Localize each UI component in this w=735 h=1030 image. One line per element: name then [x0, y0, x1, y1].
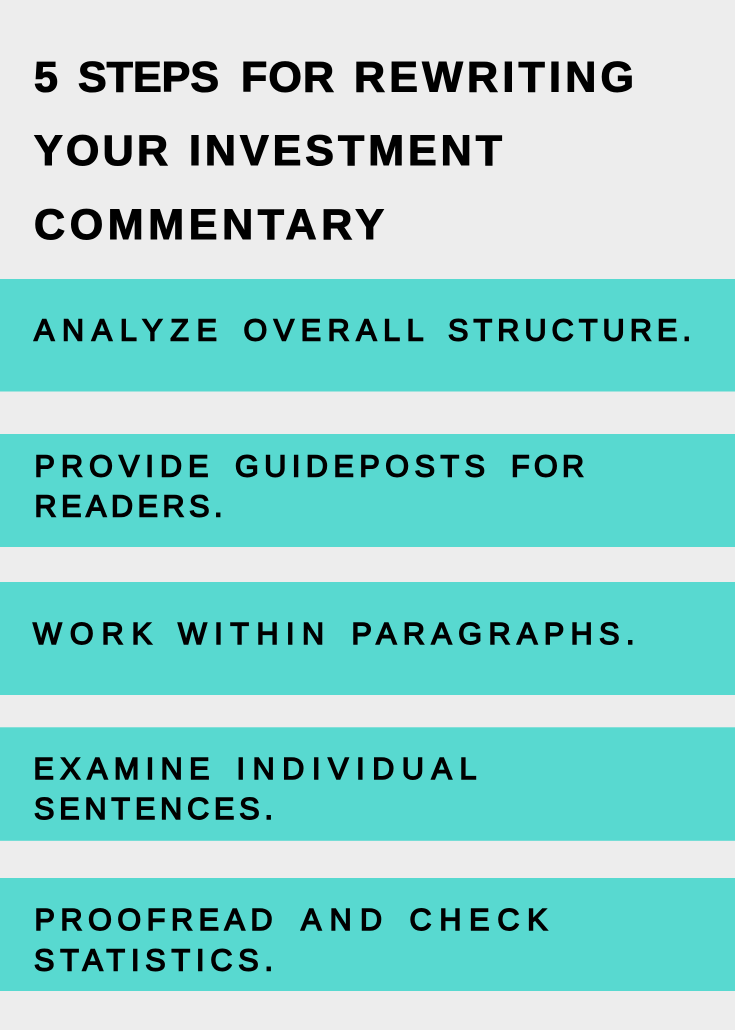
panel: step 1 analyze overall structure: ANALYZE	[34, 314, 217, 348]
panel: step 1 analyze overall structure: OVERALL	[244, 314, 423, 348]
panel: step 3 work within paragraphs: WITHIN	[178, 617, 324, 651]
panel: step 4 examine individual sentences: SENTENCES.	[34, 792, 273, 826]
title: FOR	[241, 54, 334, 102]
panel: step 4 examine individual sentences: EXAMINE	[34, 752, 210, 786]
title: REWRITING	[354, 54, 634, 102]
title	[34, 54, 634, 249]
panel: step 5 proofread and check statistics: AND	[301, 903, 382, 937]
panel: step 2 provide guideposts	[0, 434, 735, 547]
panel: step 2 provide guideposts: PROVIDE	[34, 450, 208, 484]
panel: step 4 examine individual sentences	[0, 727, 735, 841]
panel: step 3 work within paragraphs: WORK	[33, 617, 152, 651]
panel: step 5 proofread and check statistics: CHECK	[410, 903, 548, 937]
title: INVESTMENT	[189, 127, 502, 175]
title: STEPS	[78, 54, 219, 102]
panel: step 2 provide guideposts: READERS.	[34, 490, 222, 524]
title: YOUR	[34, 127, 168, 175]
panel: step 3 work within paragraphs: PARAGRAPHS.	[352, 617, 634, 651]
panel: step 1 analyze overall structure: STRUCTURE.	[448, 314, 691, 348]
panel: step 2 provide guideposts: FOR	[511, 450, 584, 484]
title: 5	[34, 54, 58, 102]
panel: step 3 work within paragraphs	[0, 582, 735, 695]
panel: step 1 analyze overall structure	[0, 279, 735, 392]
title: COMMENTARY	[34, 201, 384, 249]
panel: step 5 proofread and check statistics	[0, 878, 735, 991]
panel: step 4 examine individual sentences: INDIVIDUAL	[236, 752, 476, 786]
panel: step 5 proofread and check statistics: PROOFREAD	[34, 903, 272, 937]
panel: step 5 proofread and check statistics: STATISTICS.	[34, 944, 273, 978]
panel: step 2 provide guideposts: GUIDEPOSTS	[235, 450, 485, 484]
